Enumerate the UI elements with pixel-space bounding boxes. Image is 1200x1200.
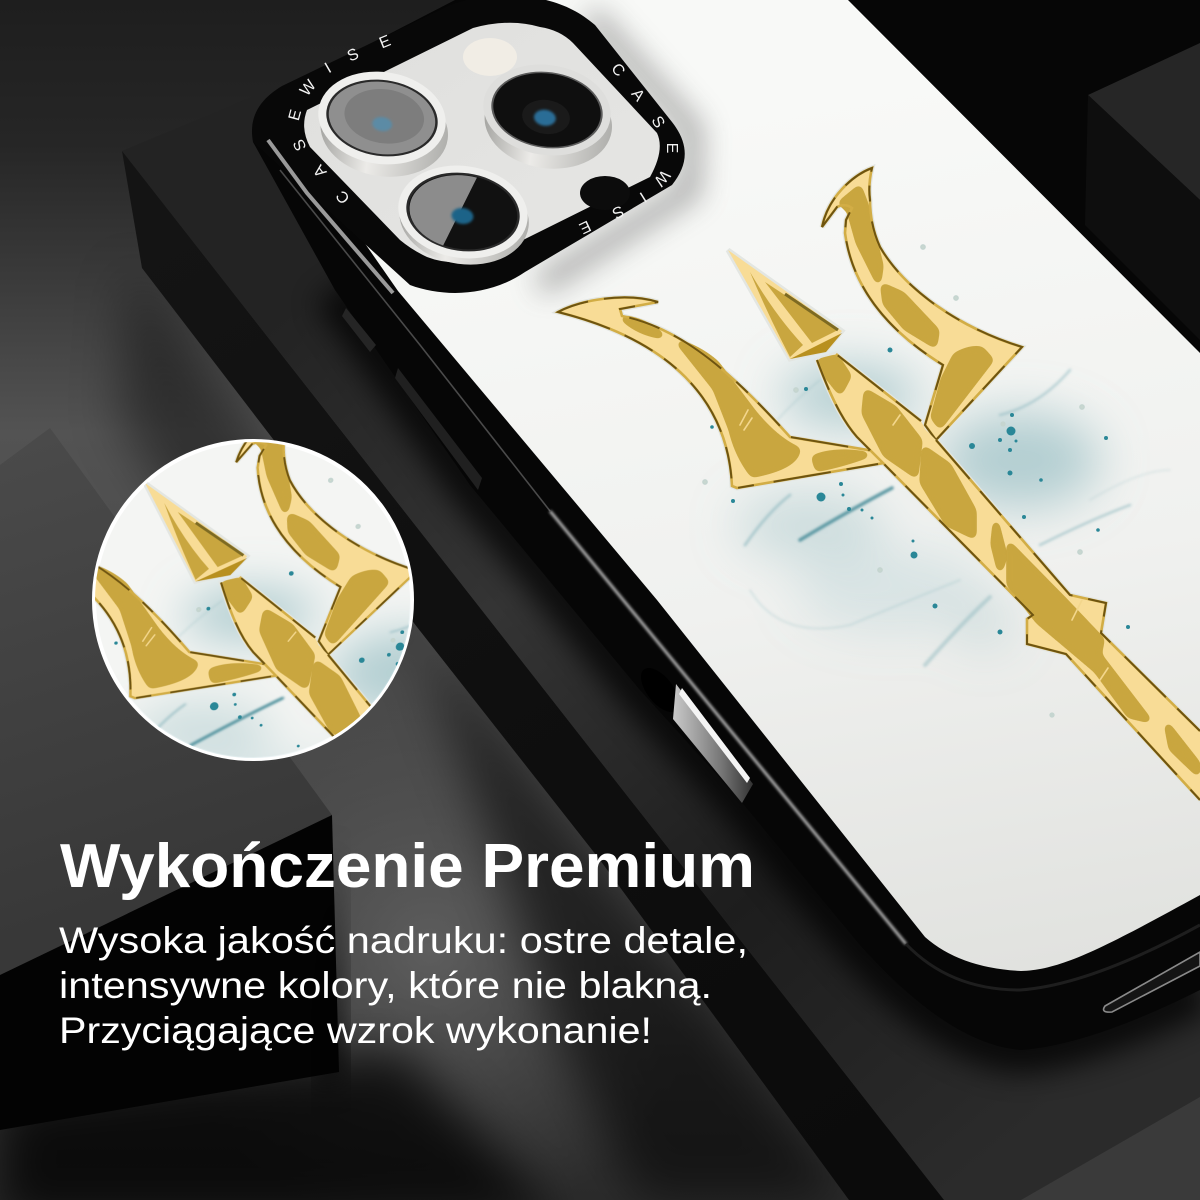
lower left plinth [0, 428, 342, 1130]
zoom inset circle [92, 439, 414, 761]
phone [252, 0, 1200, 1050]
island: clear rim [268, 140, 393, 293]
island: CASEWISE ring lettering: W [297, 76, 320, 100]
island: CASEWISE ring lettering: C [333, 187, 354, 207]
upper right dark blocks [848, 0, 1200, 360]
phone: white printed back [300, 0, 1200, 971]
phone: camera island [252, 0, 692, 293]
title: Wykończenie Premium [60, 832, 755, 901]
lower right floor [1021, 1097, 1200, 1200]
phone: black case body [253, 0, 1200, 1050]
description text [59, 920, 748, 1051]
description text: Wysoka jakość nadruku: ostre detale, [59, 920, 748, 961]
island: CASEWISE ring lettering: A [310, 161, 330, 180]
island: CASEWISE ring lettering [286, 33, 680, 237]
island: soft shadow [540, 15, 692, 285]
phone: side buttons [342, 308, 1200, 1012]
floor light pool [150, 640, 750, 1200]
island: flash [463, 38, 517, 76]
island: upper right lens [476, 57, 620, 177]
phone: cast shadow [335, 290, 1200, 1050]
phone: glossy rim [280, 170, 1200, 990]
island: black frame [252, 0, 685, 293]
island: CASEWISE ring lettering: S [290, 136, 310, 153]
island: CASEWISE ring lettering: E [286, 108, 305, 122]
island: CASEWISE ring lettering: S [609, 202, 626, 222]
floor shadows [0, 270, 849, 1200]
island: CASEWISE ring lettering: I [322, 60, 334, 77]
island: CASEWISE ring lettering: E [663, 143, 680, 153]
island: CASEWISE ring lettering: I [636, 188, 649, 205]
island: CASEWISE ring lettering: C [607, 60, 628, 80]
island: lower lens [391, 157, 536, 273]
island: CASEWISE ring lettering: E [377, 33, 393, 52]
description text: intensywne kolory, które nie blakną. [59, 965, 712, 1006]
description text: Przyciągające wzrok wykonanie! [59, 1010, 652, 1051]
island: glass [304, 23, 660, 262]
island: dark sensor [580, 176, 630, 210]
large plinth side [122, 151, 944, 1200]
phone: trident artwork [558, 168, 1200, 800]
island: CASEWISE ring lettering: E [576, 217, 593, 237]
island: CASEWISE ring lettering: W [650, 166, 673, 190]
island: CASEWISE ring lettering: S [648, 113, 668, 131]
island: upper left lens [311, 64, 456, 185]
island: CASEWISE ring lettering: A [628, 86, 648, 105]
island: CASEWISE ring lettering: S [345, 46, 362, 65]
